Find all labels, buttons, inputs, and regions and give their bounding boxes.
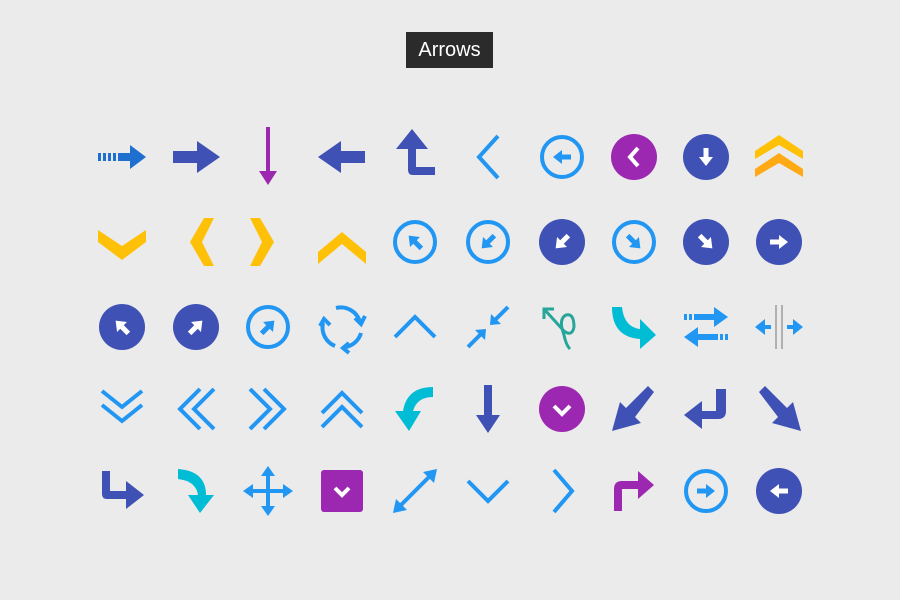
icon: navy down-left xyxy=(539,219,585,265)
icon: exchange arrows xyxy=(684,307,728,347)
icon: navy circle left xyxy=(756,468,802,514)
icon: four-way move xyxy=(243,466,293,516)
icon: dotted right arrow xyxy=(98,145,146,169)
icon: purple square chevron down xyxy=(321,470,363,512)
icon: purple circle chevron down xyxy=(539,386,585,432)
icon: purple circle chevron left xyxy=(611,134,657,180)
icon: amber chevron left xyxy=(190,218,214,266)
icon: double chevron up xyxy=(322,393,362,427)
icon: outline up-left xyxy=(395,222,435,262)
icon: navy down-right arrow xyxy=(759,386,801,431)
icon: thin chevron right xyxy=(554,470,572,512)
icon: teal curved arrow down-right xyxy=(612,307,656,349)
icon: navy up-left xyxy=(99,304,145,350)
icon: double chevron right xyxy=(250,389,284,429)
title xyxy=(406,32,493,68)
title: Arrows xyxy=(418,39,481,61)
icon: thin chevron down xyxy=(468,481,508,501)
icon: teal curved arrow down xyxy=(178,469,214,513)
icon: return arrow xyxy=(684,389,726,429)
icon: amber double chevron up xyxy=(755,135,803,177)
icon: double chevron down xyxy=(102,391,142,421)
icon: thin chevron up xyxy=(395,317,435,337)
icon: thin chevron left xyxy=(479,136,498,178)
icon: navy circle down xyxy=(683,134,729,180)
icon: outline down-left xyxy=(468,222,508,262)
icon: amber chevron right xyxy=(250,218,274,266)
icon: purple turn right arrow xyxy=(614,471,654,511)
icon: navy right xyxy=(756,219,802,265)
icon: teal curved arrow down-left xyxy=(395,387,433,431)
icon: left arrow xyxy=(318,141,365,173)
icon: navy down-right xyxy=(683,219,729,265)
icon: compress arrows xyxy=(468,307,508,347)
icon: amber chevron down xyxy=(98,230,146,260)
icon: outline up-right xyxy=(248,307,288,347)
icon: diagonal double arrow xyxy=(393,469,437,513)
icon: outline circle right xyxy=(686,471,726,511)
icon: circle outline left xyxy=(542,137,582,177)
icon: purple down arrow xyxy=(259,127,277,185)
icon: right arrow xyxy=(173,141,220,173)
icon: double chevron left xyxy=(180,389,214,429)
icon: amber chevron up xyxy=(318,232,366,264)
icon: split arrows xyxy=(755,305,803,349)
icon: teal squiggle arrow xyxy=(544,309,574,349)
icon: corner up arrow xyxy=(396,129,435,175)
icon: navy up-right xyxy=(173,304,219,350)
icon: L arrow down-right xyxy=(102,471,144,509)
icon: navy down arrow xyxy=(476,385,500,433)
icon: navy down-left arrow xyxy=(612,386,654,431)
icon: outline down-right xyxy=(614,222,654,262)
icon: circular arrows xyxy=(320,307,365,353)
